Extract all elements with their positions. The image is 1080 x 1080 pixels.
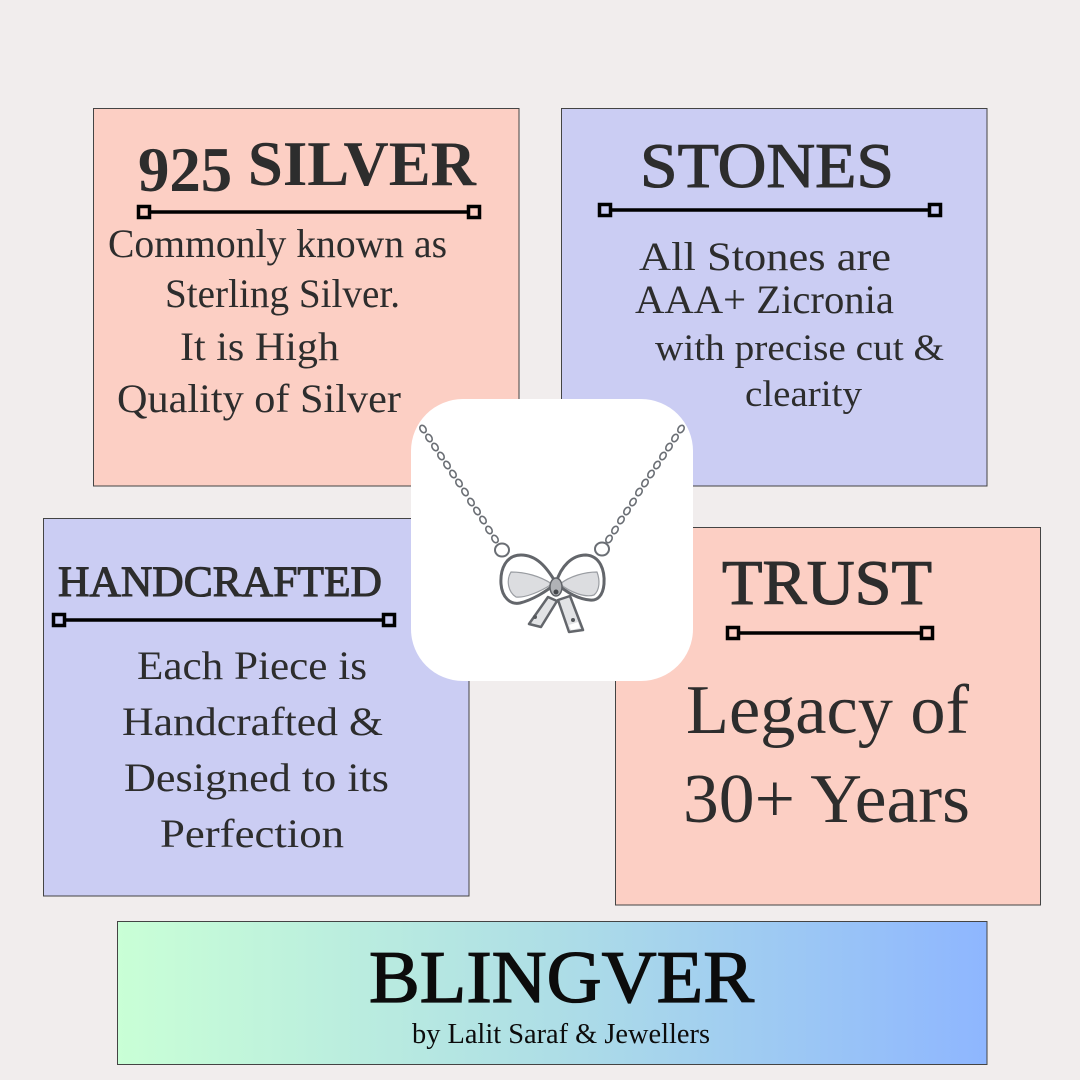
icon: bow pendant xyxy=(495,542,609,632)
icon: left chain xyxy=(418,424,500,544)
panel: necklace photo xyxy=(411,399,693,681)
panel: stones xyxy=(562,108,987,486)
text: handcrafted description: Handcrafted & xyxy=(122,699,383,744)
icon: right chain xyxy=(604,424,686,544)
text: silver description xyxy=(108,221,447,421)
brand tagline: by Lalit Saraf & Jewellers xyxy=(412,1018,710,1050)
text: trust description: Legacy of xyxy=(686,672,970,749)
text: stones description: clearity xyxy=(745,374,863,415)
text: stones description: with precise cut & xyxy=(655,328,944,369)
text: stones description xyxy=(635,234,944,415)
heading: stones: STONES xyxy=(640,130,894,201)
text: trust description xyxy=(683,672,970,838)
brand name: BLINGVER xyxy=(369,937,755,1019)
divider: handcrafted xyxy=(54,614,394,626)
text: handcrafted description: Each Piece is xyxy=(137,643,367,688)
heading: 925 silver: SILVER xyxy=(232,129,477,199)
panel: handcrafted xyxy=(44,518,469,896)
heading: 925 silver: 925 xyxy=(138,135,232,205)
panel: trust xyxy=(616,528,1040,905)
panel: 925 silver xyxy=(94,108,519,486)
text: handcrafted description: Designed to its xyxy=(124,755,389,800)
text: handcrafted description: Perfection xyxy=(160,811,344,856)
heading: trust: TRUST xyxy=(722,547,932,618)
heading: handcrafted: HANDCRAFTED xyxy=(58,559,382,606)
text: stones description: AAA+ Zicronia xyxy=(635,277,894,322)
text: silver description: Quality of Silver xyxy=(117,376,401,421)
text: stones description: All Stones are xyxy=(639,234,891,279)
panel: brand banner xyxy=(118,922,987,1064)
text: silver description: Sterling Silver. xyxy=(165,271,400,316)
divider: trust xyxy=(728,628,932,638)
divider: 925 silver xyxy=(138,206,480,218)
text: handcrafted description xyxy=(122,643,389,856)
text: silver description: It is High xyxy=(180,324,339,369)
text: silver description: Commonly known as xyxy=(108,221,447,266)
divider: stones xyxy=(600,204,940,216)
text: trust description: 30+ Years xyxy=(683,761,970,838)
